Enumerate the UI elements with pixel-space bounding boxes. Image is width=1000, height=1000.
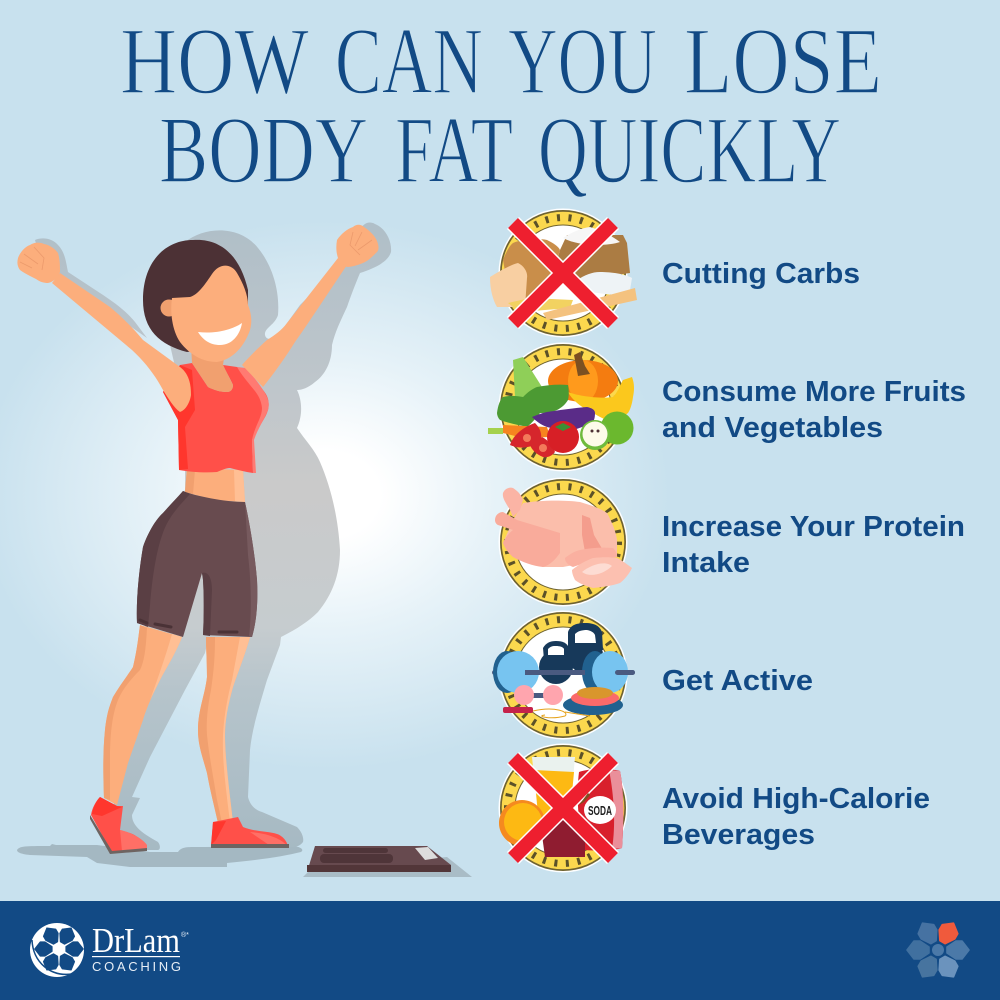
- DrLam Coaching logo: [30, 921, 189, 977]
- barbell: [492, 651, 635, 693]
- dark bottle: [542, 817, 585, 857]
- title: YOU: [508, 8, 657, 114]
- left shoe: [90, 797, 147, 854]
- pasta: [508, 298, 573, 312]
- midriff: [185, 468, 245, 502]
- carrot: [503, 425, 550, 438]
- left fist finger creases: [20, 247, 44, 270]
- illustration: woman with former-self shadow on scale: [17, 223, 472, 877]
- chicken breast: [572, 557, 632, 588]
- title: QUICKLY: [538, 97, 841, 203]
- face: [160, 266, 251, 362]
- eggplant: [532, 407, 595, 430]
- fist right: [336, 225, 378, 267]
- label: fruits and vegetables: Consume More Fruits: [662, 376, 966, 408]
- jump rope: [503, 707, 590, 718]
- wing bone: [503, 488, 523, 517]
- right shoe: [211, 817, 289, 848]
- apple: [600, 412, 634, 444]
- DrLam Coaching logo: COACHING: [92, 959, 181, 974]
- soda label: SODA: [588, 803, 612, 818]
- fist left: [17, 243, 60, 283]
- icon: protein: [495, 478, 632, 606]
- weight plates: [563, 687, 623, 715]
- shorts: [137, 491, 257, 637]
- left leg: [103, 625, 182, 805]
- drumstick: [495, 512, 560, 567]
- label: protein: Increase Your Protein: [662, 511, 965, 543]
- red crop top: [163, 363, 269, 473]
- flower mark: [907, 919, 969, 981]
- label: get active: Get Active: [662, 665, 813, 697]
- tomato slices: [510, 423, 541, 448]
- label: cutting carbs: Cutting Carbs: [662, 258, 860, 290]
- bathroom scale: [303, 846, 472, 877]
- title: BODY: [159, 97, 368, 203]
- chicken body: [503, 501, 617, 567]
- logo mark: [30, 923, 84, 977]
- banana: [568, 377, 634, 422]
- apple half: [580, 420, 610, 450]
- title: FAT: [395, 97, 513, 203]
- silhouette of larger body: [35, 223, 391, 850]
- label: fruits and vegetables: [662, 376, 966, 444]
- label: beverages: Avoid High-Calorie: [662, 783, 930, 815]
- background glow: [0, 215, 680, 775]
- label: beverages: Beverages: [662, 819, 815, 851]
- bread slice: [490, 263, 527, 307]
- tender: [565, 548, 617, 567]
- icon: carbs crossed out: [490, 208, 637, 338]
- label: protein: Intake: [662, 547, 750, 579]
- shadow on floor: [17, 844, 302, 867]
- soda can: [578, 769, 623, 851]
- neck: [191, 345, 233, 392]
- orange slice: [499, 800, 545, 846]
- raised arm right: [242, 225, 378, 387]
- icon: high-calorie beverages crossed out: [498, 744, 628, 872]
- bread loaf: [503, 239, 560, 303]
- raised arm left: [17, 243, 191, 412]
- pumpkin: [548, 360, 618, 402]
- title: HOW: [120, 8, 309, 114]
- flour bowl: [577, 272, 632, 295]
- tomato: [547, 421, 579, 453]
- hair: [143, 240, 248, 352]
- label: fruits and vegetables: and Vegetables: [662, 412, 883, 444]
- title: LOSE: [684, 8, 882, 114]
- footer band: [0, 901, 1000, 1000]
- right leg: [198, 637, 250, 823]
- kettlebell small: [539, 641, 573, 684]
- smile: [198, 323, 242, 345]
- glass of juice: [532, 757, 575, 815]
- dumbbell: [514, 685, 563, 705]
- right fist finger creases: [350, 232, 372, 255]
- label: beverages: [662, 783, 930, 851]
- icon: fruits and vegetables: [488, 342, 634, 472]
- DrLam Coaching logo: ®*: [181, 931, 189, 939]
- kettlebell large: [567, 623, 603, 673]
- celery: [513, 357, 542, 397]
- broccoli: [497, 385, 569, 427]
- pasta sticks: [543, 288, 637, 320]
- label: protein: [662, 511, 965, 579]
- wing: [582, 515, 604, 552]
- icon: exercise equipment: [492, 610, 635, 740]
- flour sack: [558, 235, 630, 280]
- title: [120, 8, 882, 203]
- title: CAN: [335, 8, 483, 114]
- wordmark: DrLam: [92, 921, 180, 960]
